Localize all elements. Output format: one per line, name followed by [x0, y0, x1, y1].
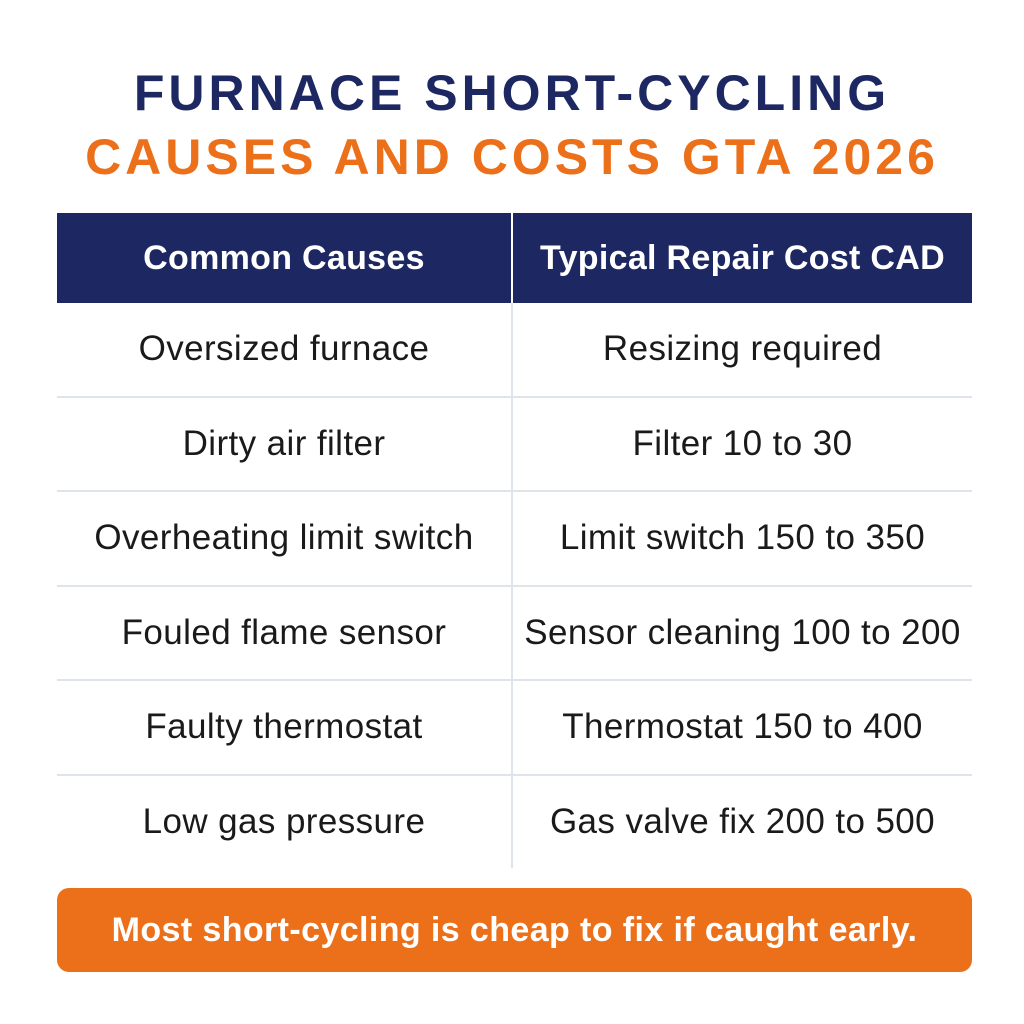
table: causes and costs: Resizing required: [603, 329, 882, 368]
table: causes and costs: Gas valve fix 200 to 500: [550, 802, 935, 841]
callout banner: Most short-cycling is cheap to fix if caught early.: [112, 911, 917, 949]
table: causes and costs: Common Causes: [143, 238, 425, 276]
table: causes and costs: Dirty air filter: [183, 424, 385, 463]
table: causes and costs: Filter 10 to 30: [632, 424, 852, 463]
table: causes and costs: Fouled flame sensor: [122, 613, 446, 652]
table: causes and costs: Sensor cleaning 100 to 200: [524, 613, 961, 652]
table: causes and costs: Limit switch 150 to 350: [560, 518, 925, 557]
table: causes and costs: Overheating limit switch: [94, 518, 474, 557]
table: causes and costs: Typical Repair Cost CAD: [540, 238, 945, 276]
title line 2: CAUSES AND COSTS GTA 2026: [85, 129, 939, 185]
table: causes and costs: Low gas pressure: [143, 802, 425, 841]
table: causes and costs: Thermostat 150 to 400: [562, 707, 923, 746]
table: causes and costs: [57, 213, 972, 868]
table: causes and costs: Oversized furnace: [139, 329, 429, 368]
table: causes and costs: Faulty thermostat: [145, 707, 423, 746]
title line 1: FURNACE SHORT-CYCLING: [134, 65, 890, 121]
callout banner: [57, 888, 972, 972]
